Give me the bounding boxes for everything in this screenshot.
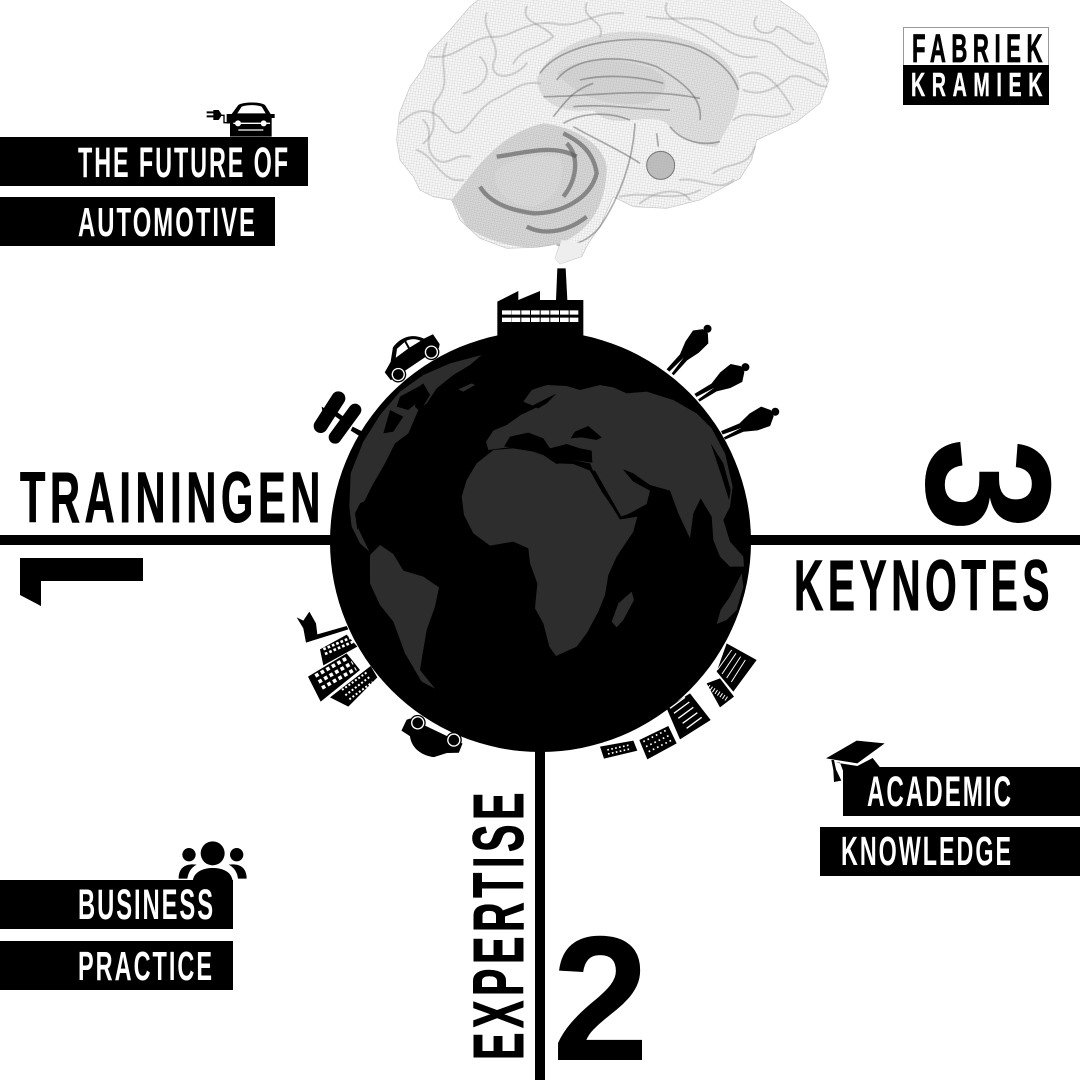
icon: electric car with plug [207, 102, 275, 137]
panel: the future of automotive: THE FUTURE OF [78, 139, 290, 187]
axis line: vertical [535, 745, 545, 1080]
icon: buildings lower left [297, 612, 377, 707]
seas [355, 383, 731, 567]
axis line: horizontal right [745, 535, 1080, 545]
south america [370, 545, 439, 689]
panel: academic knowledge [820, 767, 1080, 876]
brain illustration [397, 0, 829, 264]
icon: ship [321, 398, 363, 437]
icon: car bottom left of globe [396, 711, 466, 768]
number: 1 [20, 558, 143, 606]
icon: group of people [179, 841, 247, 882]
heading: Expertise: EXPERTISE [460, 788, 539, 1060]
icon: graduation cap [826, 741, 885, 782]
panel: business practice [0, 880, 233, 990]
limbic ring [537, 32, 739, 147]
axis line: horizontal left [0, 535, 335, 545]
logo: Fabriek Kramiek [903, 27, 1049, 105]
north america [349, 355, 482, 552]
panel: the future of automotive [0, 137, 308, 246]
panel: the future of automotive: AUTOMOTIVE [78, 199, 257, 245]
cerebellum [452, 123, 607, 247]
icon: car top left of globe [375, 323, 445, 387]
icon: factory [497, 268, 583, 342]
continents [349, 355, 744, 689]
panel: business practice: BUSINESS [78, 881, 215, 929]
icon: buildings lower right [600, 643, 757, 759]
globe [330, 331, 751, 752]
heading: Trainingen: TRAININGEN [20, 459, 325, 538]
icon: people on globe [663, 319, 783, 446]
australia and madagascar [717, 573, 743, 624]
panel: business practice: PRACTICE [78, 943, 214, 989]
africa [462, 448, 637, 656]
eurasia [486, 385, 744, 567]
